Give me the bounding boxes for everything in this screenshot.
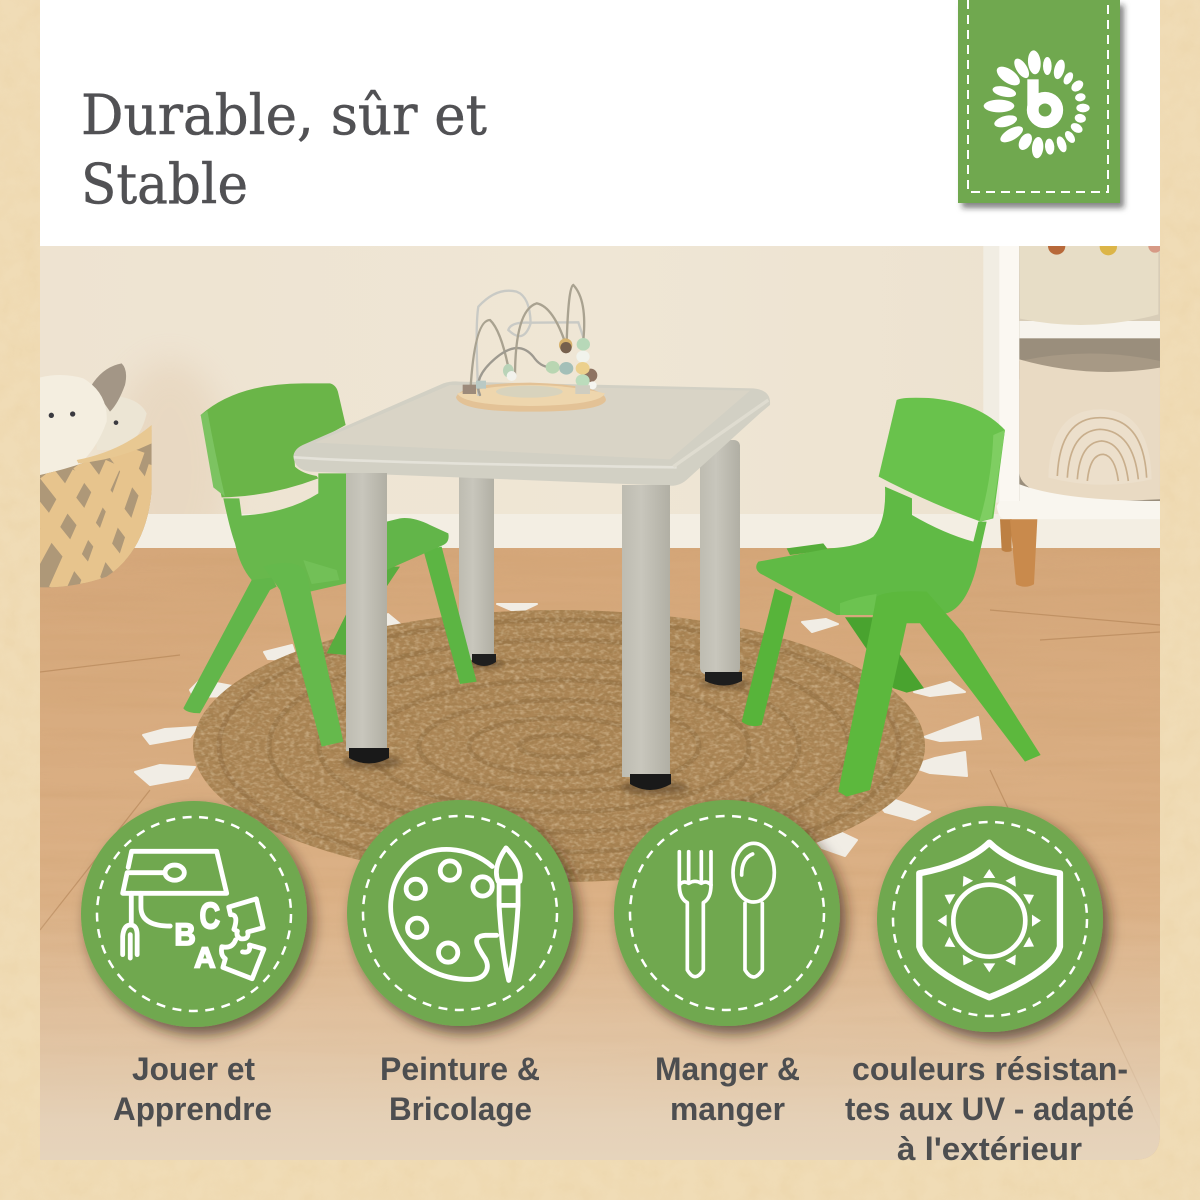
right green chair: [742, 398, 1041, 797]
bead maze toy: [456, 285, 606, 412]
photo: children's table and chairs: [20, 237, 1162, 1160]
basket weave: [40, 444, 152, 588]
badge: peinture et bricolage: [347, 800, 573, 1026]
shelf unit: [983, 237, 1162, 587]
wicker basket and plush toys: [40, 364, 152, 588]
left green chair: [183, 383, 477, 747]
header panel: [40, 0, 1160, 246]
wires: [471, 285, 584, 395]
table front legs: [346, 473, 671, 790]
label: jouer et apprendre: Jouer et: [132, 1051, 255, 1087]
icon: graduation cap, letters and puzzle: B: [174, 916, 196, 952]
upper basket: [1019, 246, 1158, 325]
jute rug: [193, 610, 925, 882]
icon: graduation cap, letters and puzzle: A: [194, 942, 216, 974]
icon: graduation cap, letters and puzzle: C: [199, 894, 220, 936]
skirting board: [40, 514, 1160, 548]
wooden floor: [40, 548, 1160, 1160]
icon: graduation cap, letters and puzzle: [123, 851, 264, 979]
label: manger: manger: [670, 1091, 785, 1127]
lower basket: [1019, 353, 1160, 501]
title: Stable: [81, 152, 248, 216]
label: peinture et bricolage: Peinture &: [380, 1051, 540, 1087]
label: couleurs résistantes aux UV: [845, 1051, 1134, 1167]
icon: palette and brush: [391, 848, 520, 980]
label: jouer et apprendre: Apprendre: [113, 1091, 272, 1127]
wooden base: [456, 383, 606, 412]
label: manger: Manger &: [655, 1051, 800, 1087]
badge: résistant aux UV: [877, 806, 1103, 1032]
tag stitching: [968, 0, 1108, 192]
label: couleurs résistantes aux UV: couleurs résistan-: [852, 1051, 1128, 1087]
beads: [463, 338, 597, 394]
label: couleurs résistantes aux UV: tes aux UV - adapté: [845, 1091, 1134, 1127]
title: Durable, sûr et: [81, 83, 487, 147]
label: couleurs résistantes aux UV: à l'extérieur: [897, 1131, 1082, 1167]
icon: fork and spoon: [679, 843, 774, 977]
shelf base and legs: [997, 484, 1160, 519]
table top: [293, 381, 770, 486]
table back legs: [459, 440, 742, 686]
logo tag: [958, 0, 1120, 203]
label: peinture et bricolage: Bricolage: [389, 1091, 532, 1127]
logo: flower b: [984, 50, 1090, 159]
bottom fade: [40, 927, 1160, 1160]
title: [81, 83, 487, 216]
wall: [40, 246, 999, 514]
label: jouer et apprendre: [113, 1051, 272, 1127]
badge: manger: [614, 800, 840, 1026]
label: manger: [655, 1051, 800, 1127]
label: peinture et bricolage: [380, 1051, 540, 1127]
badge: jouer et apprendre: [81, 801, 307, 1027]
plush toys: [40, 364, 146, 475]
tassels around rug: [135, 604, 981, 856]
table leg shadows: [342, 659, 751, 795]
icon: shield with sun: [919, 843, 1060, 997]
